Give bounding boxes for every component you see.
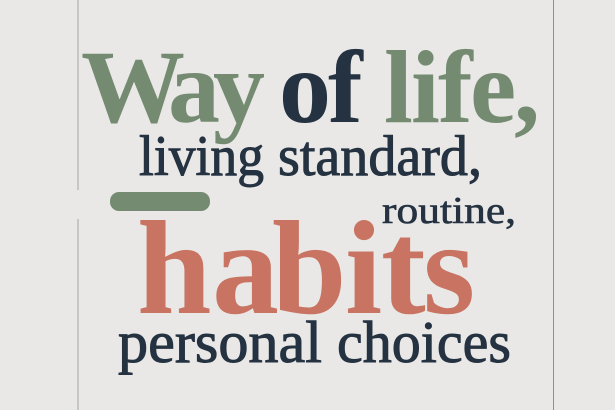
heading: Way of life, [81, 30, 540, 145]
heading: habits: habits [137, 194, 475, 342]
heading: Way of life,: of [279, 30, 364, 145]
text: personal choices [118, 309, 511, 375]
text: personal choices: personal [118, 309, 322, 375]
text: living standard,: standard, [278, 125, 482, 188]
heading: Way of life,: life, [384, 30, 540, 145]
text: living standard,: living [139, 125, 264, 188]
text: personal choices: choices [337, 309, 511, 375]
text: routine,: routine, [382, 190, 516, 232]
text: living standard, [139, 125, 482, 188]
heading: Way of life,: Way [81, 30, 265, 145]
accent bar [110, 192, 210, 211]
